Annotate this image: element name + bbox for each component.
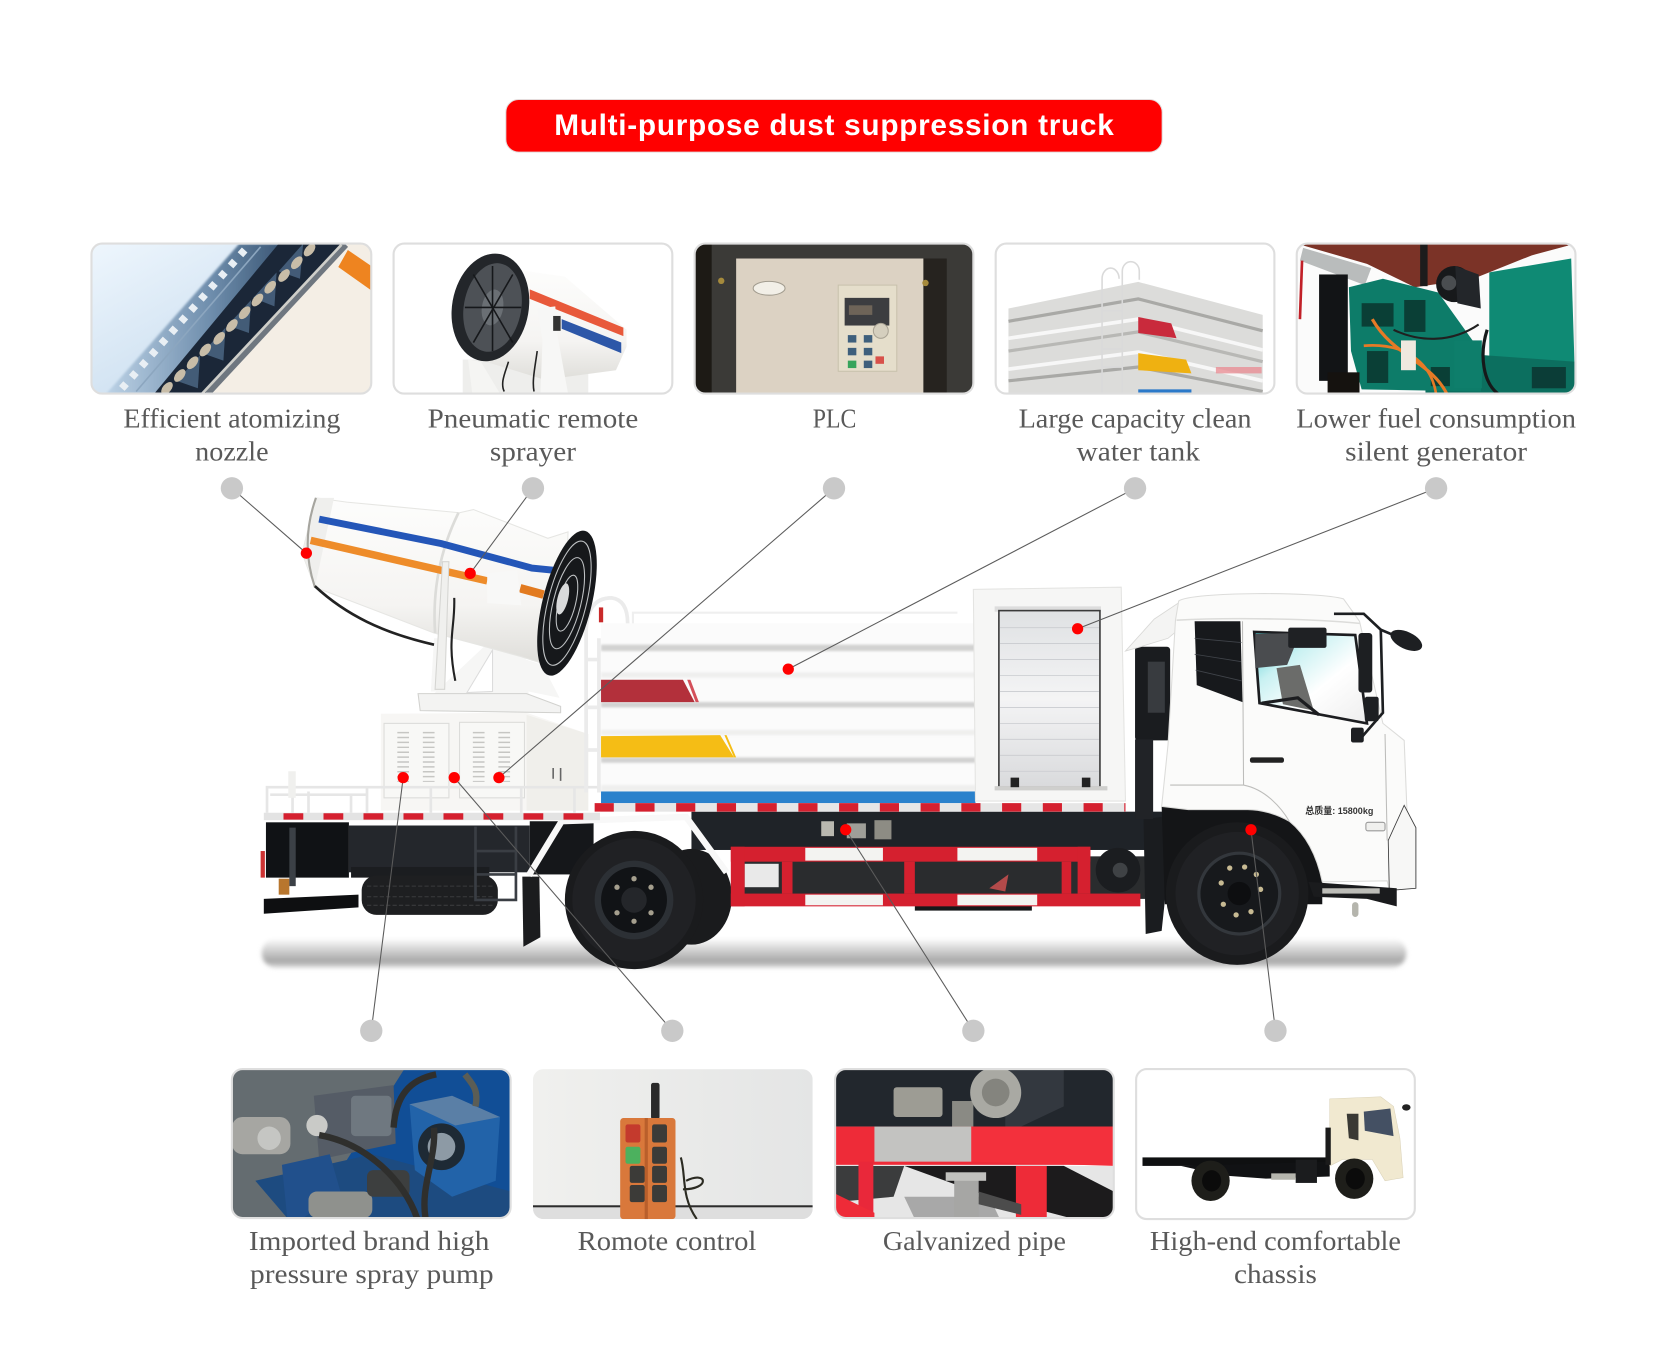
photo: nozzle ring xyxy=(91,242,371,397)
louver panel xyxy=(1195,621,1242,702)
blue stripe xyxy=(319,519,553,570)
equipment cabinet xyxy=(381,713,588,811)
panel: galvanized pipe xyxy=(835,1067,1114,1256)
door seams xyxy=(1170,621,1387,840)
panel: pneumatic remote sprayer xyxy=(394,244,672,467)
lift cylinder xyxy=(435,562,449,689)
rear wheels xyxy=(565,831,732,969)
tank ladder xyxy=(586,598,628,793)
caption: water tank xyxy=(1077,436,1200,467)
photo: truck chassis xyxy=(1136,1069,1415,1219)
blue stripe xyxy=(601,791,975,803)
photo: pump unit xyxy=(232,1069,511,1218)
caption: pressure spray pump xyxy=(250,1258,494,1289)
caption: PLC xyxy=(813,403,856,434)
connector lines xyxy=(232,488,1436,1031)
caption: Pneumatic remote xyxy=(428,403,638,434)
headlight xyxy=(1366,822,1385,831)
base plate xyxy=(418,694,561,713)
panel: high-end comfortable chassis xyxy=(1136,1069,1415,1289)
mud flap xyxy=(522,877,540,947)
flat bed strip xyxy=(264,813,600,820)
panel: PLC xyxy=(695,244,973,434)
air intake and exhaust xyxy=(1135,647,1170,819)
roof highlight xyxy=(1177,619,1360,623)
grey anchor dots xyxy=(221,477,1447,1042)
red marker lamp xyxy=(599,607,603,622)
photo: tank corner xyxy=(1008,261,1263,392)
caption: Romote control xyxy=(578,1225,757,1256)
front wheel xyxy=(1166,822,1308,965)
orange stripe xyxy=(311,540,487,581)
photo: sprayer xyxy=(452,254,626,392)
hoses xyxy=(315,586,434,645)
mid chassis xyxy=(691,812,1188,934)
weight marking: 总质量: 15800kg xyxy=(1305,805,1373,817)
caption: nozzle xyxy=(195,436,269,467)
caption: Lower fuel consumption xyxy=(1296,403,1576,434)
water tank xyxy=(595,613,1125,812)
red hotspot dots xyxy=(301,548,1257,835)
caption: sprayer xyxy=(490,436,576,467)
front wheel arch xyxy=(1162,806,1322,904)
mirrors xyxy=(1334,614,1425,743)
yellow stripe xyxy=(601,735,734,757)
bumper xyxy=(1388,805,1416,890)
support legs xyxy=(431,604,560,698)
red stripe xyxy=(601,680,695,702)
panel: imported brand high pressure spray pump xyxy=(232,1069,511,1289)
rear frame and undercarriage xyxy=(261,821,594,914)
door window xyxy=(1254,628,1367,723)
panel: efficient atomizing nozzle xyxy=(91,242,371,467)
protective side rails xyxy=(731,847,1140,906)
spray cannon xyxy=(302,498,609,713)
access ladder xyxy=(476,827,516,900)
photo: pipe guard xyxy=(835,1067,1114,1219)
photo: generator xyxy=(1297,244,1575,394)
panel: lower fuel consumption silent generator xyxy=(1296,244,1576,467)
panel: remote control xyxy=(533,1069,813,1256)
panel: large capacity clean water tank xyxy=(996,244,1274,467)
white fender xyxy=(529,817,727,876)
photo: control cabinet xyxy=(695,244,973,394)
cab xyxy=(1125,594,1425,917)
caption: High-end comfortable xyxy=(1150,1225,1401,1256)
ground shadow xyxy=(262,938,1406,968)
spare tire xyxy=(362,876,498,915)
truck illustration xyxy=(261,498,1425,969)
caption: Galvanized pipe xyxy=(883,1225,1066,1256)
infographic canvas xyxy=(90,99,1576,1289)
caption: chassis xyxy=(1234,1258,1317,1289)
door handle xyxy=(1250,757,1284,763)
pivot housing xyxy=(487,570,521,605)
caption: silent generator xyxy=(1345,436,1527,467)
caption: Imported brand high xyxy=(249,1225,490,1256)
caption: Large capacity clean xyxy=(1019,403,1252,434)
barrel xyxy=(302,498,568,663)
equipment compartment xyxy=(973,587,1125,801)
title banner: Multi-purpose dust suppression truck xyxy=(554,109,1114,142)
guard rail xyxy=(267,771,600,813)
title banner xyxy=(506,99,1162,152)
fan face xyxy=(525,525,609,681)
photo: remote handset xyxy=(533,1069,813,1219)
caption: Efficient atomizing xyxy=(123,403,341,434)
